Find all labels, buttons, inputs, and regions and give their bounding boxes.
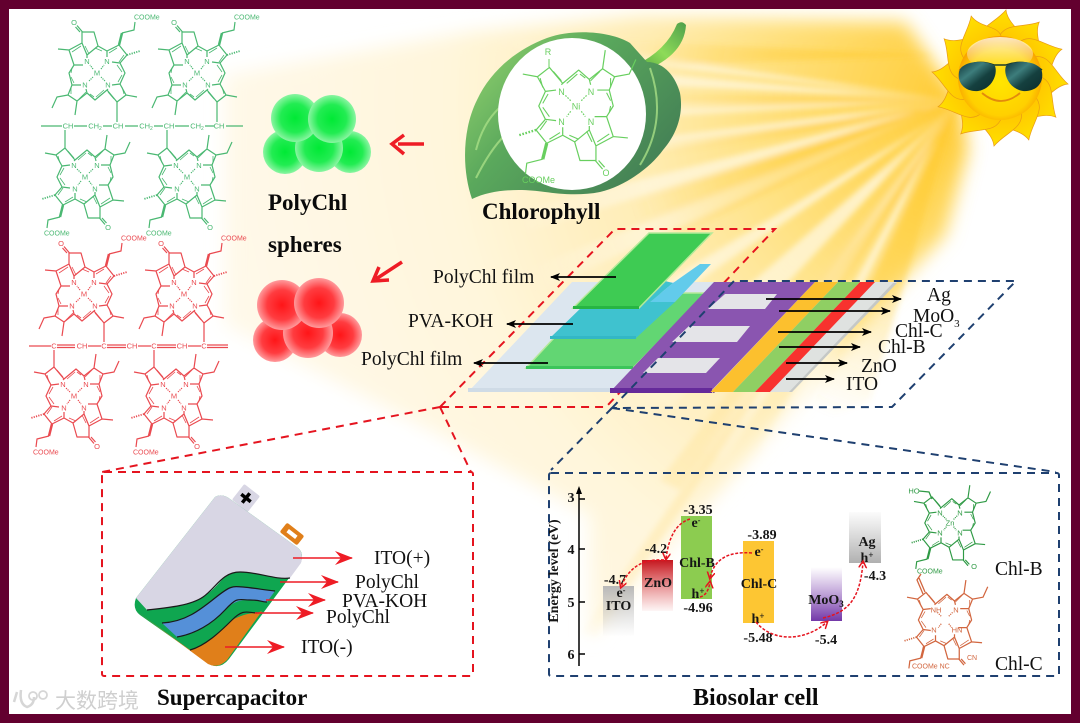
green monomer 2: N [182, 80, 188, 90]
heading: PolyChl spheres: PolyChl [268, 190, 347, 215]
red monomer 4: COOMe [133, 450, 159, 456]
red connector left [102, 407, 440, 472]
molecule: Chl-B: N [957, 508, 963, 518]
molecule: Chl-C: N [931, 626, 937, 634]
leaf stem [630, 22, 686, 74]
watermark circles [29, 691, 47, 700]
energy bar: Chl-C: + [759, 611, 764, 621]
lower PolyChl film [526, 293, 706, 368]
energy bar: Chl-C: Chl-C [741, 577, 777, 592]
red connector right [440, 407, 471, 472]
green backbone: 2 [150, 126, 153, 132]
green monomer 1 [52, 14, 160, 115]
PVA-KOH film [550, 270, 675, 338]
red monomer 4: N [181, 404, 187, 412]
energy level axis: 6 [568, 648, 574, 663]
green backbone: CH [139, 122, 150, 130]
arrow: chlorophyll to red spheres [373, 262, 402, 281]
green monomer 1: N [105, 80, 111, 90]
label: PVA-KOH: PVA-KOH [408, 311, 493, 332]
panel border [102, 472, 473, 676]
green monomer 3: M [82, 172, 88, 182]
panel: biosolar cell [547, 473, 1059, 676]
energy bar: Chl-B: + [699, 586, 704, 596]
energy level axis: Energy level (eV) [547, 519, 562, 623]
molecule: Chl-C [904, 574, 988, 670]
solar cell layer labels: ITO [846, 374, 878, 395]
solar cell layer labels: ZnO [861, 356, 897, 377]
arrow: lower PolyChl film [474, 362, 548, 364]
chlorophyll molecule: Ni [572, 102, 580, 112]
arrow: PVA-KOH [507, 323, 573, 325]
green monomer 3: N [72, 184, 78, 194]
red monomer 4: M [171, 392, 177, 400]
red monomer 3: N [81, 404, 87, 412]
green polymer structure [41, 14, 260, 238]
red monomer 2: N [192, 302, 198, 310]
energy bar: Ag: + [868, 550, 873, 560]
white circle in leaf [498, 38, 646, 190]
red monomer 1: COOMe [121, 236, 147, 242]
label: PolyChl film upper: PolyChl film [433, 267, 534, 288]
green monomer 1: COOMe [134, 14, 160, 22]
Chl-B stripe [755, 282, 876, 392]
solar cell layer labels: Chl-C [895, 321, 943, 342]
watermark [14, 690, 139, 713]
chlorophyll molecule: COOMe [522, 175, 555, 185]
sun rays [225, 16, 968, 640]
device dashed outline: supercapacitor [440, 229, 775, 407]
solar cell layer labels: Chl-B [878, 337, 926, 358]
device dashed outline: biosolar cell [612, 281, 1016, 408]
chlorophyll molecule: O [602, 168, 610, 178]
green monomer 2: O [171, 18, 177, 27]
energy bar: ITO [603, 573, 634, 637]
solar cell layer labels: 3 [954, 318, 960, 330]
energy bar: Ag: -4.3 [864, 569, 886, 584]
red PolyChl spheres [253, 278, 362, 362]
energy bar: Chl-C: - [761, 545, 764, 554]
red monomer 3: N [60, 380, 66, 389]
molecule: Chl-B: HO [908, 486, 920, 496]
red monomer 1: N [91, 278, 97, 287]
red monomer 4: N [161, 404, 167, 412]
green backbone [41, 102, 243, 148]
energy bar: Ag: Ag [858, 535, 876, 550]
solar cell layer labels [846, 285, 960, 395]
heading: Biosolar cell: Biosolar cell [693, 685, 819, 711]
ITO strip [770, 282, 897, 392]
red monomer 3: N [61, 404, 67, 412]
green monomer 3 [42, 135, 130, 238]
red backbone: CH [177, 342, 187, 350]
energy bar: Chl-C [741, 528, 777, 646]
electrode fingers [643, 294, 777, 373]
grey top electrode [136, 495, 302, 610]
capacitor labels [301, 548, 430, 658]
panel: supercapacitor [102, 472, 473, 676]
green monomer 1: N [84, 57, 90, 66]
red monomer 4 [131, 354, 219, 456]
chlorophyll molecule: N [588, 117, 594, 127]
molecule: Chl-C: HN [952, 626, 962, 634]
smile [982, 93, 1020, 101]
watermark text: 大数跨境 [55, 690, 139, 713]
capacitor illustration [135, 484, 304, 666]
molecule: Chl-B: Zn [946, 518, 954, 528]
green backbone: CH [164, 122, 174, 130]
energy bar: Chl-C: -3.89 [747, 528, 777, 543]
green backbone: CH [63, 122, 73, 130]
green monomer 4: N [196, 161, 202, 170]
green backbone: CH [190, 122, 201, 130]
red backbone: C [101, 342, 107, 350]
red monomer 1: N [69, 302, 75, 310]
red monomer 4: O [194, 442, 200, 451]
label: Chl-B: Chl-B [995, 559, 1043, 580]
negative tab [280, 522, 304, 546]
energy bar: ZnO: -4.2 [645, 542, 667, 557]
purple silver electrode [610, 282, 815, 392]
energy level axis: 4 [568, 543, 574, 558]
chlorophyll molecule: N [558, 117, 565, 127]
red backbone: C [151, 342, 157, 350]
solar cell layer labels: Ag [927, 285, 951, 306]
red backbone: CH [77, 342, 87, 350]
energy bar: Chl-B: h [692, 587, 699, 602]
green monomer 2: COOMe [234, 14, 260, 22]
molecule: Chl-B: N [937, 508, 943, 518]
chlorophyll molecule: N [558, 87, 565, 97]
red monomer 3 [31, 354, 119, 456]
chlorophyll molecule: R [545, 47, 552, 57]
stacked device illustration [468, 233, 897, 393]
energy bar: Ag: h [861, 551, 868, 566]
solar cell layer labels: MoO [913, 306, 954, 327]
panel border [549, 473, 1059, 676]
energy bar: Chl-B [679, 503, 715, 616]
blue connector left [551, 408, 612, 470]
red polymer structure [29, 236, 247, 456]
green monomer 4: N [173, 161, 179, 170]
molecule: Chl-B: N [957, 528, 963, 538]
red backbone: CH [127, 342, 137, 350]
red monomer 2: N [191, 278, 197, 287]
molecule: Chl-B [908, 485, 990, 576]
positive tab [232, 484, 260, 512]
sunglasses [959, 62, 1042, 91]
heading: Chlorophyll: Chlorophyll [482, 199, 600, 224]
molecule: Chl-B: COOMe [917, 568, 943, 576]
green backbone: 2 [201, 126, 204, 132]
energy bar: MoO3: 3 [839, 599, 844, 609]
energy bar: ITO: ITO [606, 599, 631, 614]
ITO glass substrate [468, 282, 895, 392]
energy bar: Chl-B: -4.96 [683, 601, 713, 616]
capacitor labels: ITO(-) [301, 637, 353, 658]
watermark logo [14, 690, 34, 707]
heading: Supercapacitor: Supercapacitor [157, 685, 307, 710]
energy bar: Ag [849, 512, 886, 584]
energy bar: Chl-C: -5.48 [743, 631, 773, 646]
molecule: Chl-C: N [953, 606, 959, 614]
green monomer 4: N [194, 184, 200, 194]
green monomer 3: N [92, 184, 98, 194]
red backbone: C [51, 342, 57, 350]
red monomer 2: N [171, 278, 177, 287]
green monomer 2 [152, 14, 260, 115]
layer stack base [135, 495, 302, 666]
arrow: chlorophyll to green spheres [392, 135, 424, 154]
charge transfer arrows [621, 519, 863, 637]
molecule: Chl-C: COOMe NC [912, 664, 950, 670]
chlorophyll molecule: N [588, 87, 594, 97]
energy bar: ITO: - [623, 586, 626, 595]
green monomer 1: N [104, 57, 110, 66]
sun [930, 8, 1070, 148]
red monomer 3: O [94, 442, 100, 451]
arrows to solar cell layers [766, 299, 901, 379]
blue connector right [612, 408, 1056, 472]
red monomer 1: O [58, 239, 64, 248]
red monomer 4: N [183, 380, 189, 389]
green monomer 3: N [94, 161, 100, 170]
MoO3 stripe [710, 282, 838, 392]
red backbone: C [201, 342, 207, 350]
red monomer 3: N [83, 380, 89, 389]
molecule: Chl-C: NH [931, 606, 941, 614]
heading: PolyChl spheres [268, 190, 347, 257]
red backbone [29, 323, 228, 367]
energy bar: MoO3: -5.4 [815, 633, 837, 648]
green monomer 4 [144, 135, 232, 238]
orange bottom electrode [135, 610, 262, 666]
molecule: Chl-B: O [971, 562, 977, 571]
green monomer 2: N [205, 80, 211, 90]
red monomer 2: COOMe [221, 236, 247, 242]
chlorophyll molecule [519, 47, 636, 185]
capacitor labels: PolyChl [326, 607, 391, 628]
capacitor labels: PolyChl [355, 572, 420, 593]
energy level axis: 5 [568, 596, 574, 611]
green monomer 1: N [82, 80, 88, 90]
red monomer 1: N [71, 278, 77, 287]
green monomer 3: O [105, 223, 111, 232]
energy bar: ZnO: ZnO [644, 576, 672, 591]
Chl-C stripe [733, 282, 860, 392]
green backbone: CH [214, 122, 224, 130]
green monomer 2: N [204, 57, 210, 66]
red monomer 3: COOMe [33, 450, 59, 456]
energy bar: ITO: -4.7 [604, 573, 626, 588]
green monomer 1: O [71, 18, 77, 27]
red monomer 4: N [160, 380, 166, 389]
leaf blade [465, 32, 681, 199]
blue electrolyte [162, 587, 275, 637]
green monomer 4: O [207, 223, 213, 232]
energy bar: Chl-B: e [692, 516, 698, 531]
molecule: Chl-B: N [937, 528, 943, 538]
energy bar: ZnO [642, 542, 673, 611]
green monomer 4: M [184, 172, 190, 182]
energy bar: Chl-B: -3.35 [683, 503, 713, 518]
capacitor labels: PVA-KOH [342, 591, 427, 612]
green backbone: CH [113, 122, 123, 130]
green backbone: CH [88, 122, 99, 130]
label: PolyChl film lower: PolyChl film [361, 349, 462, 370]
red monomer 2 [139, 236, 247, 336]
upper PolyChl film [573, 233, 712, 308]
label: Chl-C: Chl-C [995, 654, 1043, 675]
green PolyChl spheres [263, 94, 371, 174]
sun face [958, 36, 1042, 120]
heading: PolyChl spheres: spheres [268, 232, 342, 257]
red monomer 2: O [158, 239, 164, 248]
green monomer 2: N [184, 57, 190, 66]
red monomer 3: M [71, 392, 77, 400]
green monomer 1: M [94, 68, 100, 78]
label arrows [225, 558, 352, 647]
red monomer 1: N [92, 302, 98, 310]
energy bar: MoO3: MoO [808, 593, 839, 608]
green monomer 3: N [71, 161, 77, 170]
red monomer 1 [39, 236, 147, 336]
green monomer 3: COOMe [44, 230, 70, 238]
energy bar: Chl-B: - [698, 516, 701, 525]
capacitor labels: ITO(+) [374, 548, 430, 569]
energy level axis [547, 486, 585, 666]
green backbone: 2 [99, 126, 102, 132]
energy bar: ITO: e [617, 586, 623, 601]
red monomer 2: M [181, 290, 187, 298]
sun petals [930, 8, 1070, 148]
green monomer 2: M [194, 68, 200, 78]
energy bar: Chl-C: e [755, 545, 761, 560]
energy bar: MoO3 [808, 567, 844, 648]
green monomer 4: COOMe [146, 230, 172, 238]
energy bar: Chl-B: Chl-B [679, 556, 715, 571]
red monomer 1: M [81, 290, 87, 298]
red monomer 2: N [169, 302, 175, 310]
molecule: Chl-C: CN [967, 655, 977, 662]
layer boundary lines [147, 572, 290, 650]
arrow: upper PolyChl film [551, 276, 616, 278]
leaf with chlorophyll molecule [465, 22, 686, 199]
energy level axis: 3 [568, 491, 574, 506]
energy bar: Chl-C: h [752, 612, 759, 627]
green monomer 4: N [174, 184, 180, 194]
